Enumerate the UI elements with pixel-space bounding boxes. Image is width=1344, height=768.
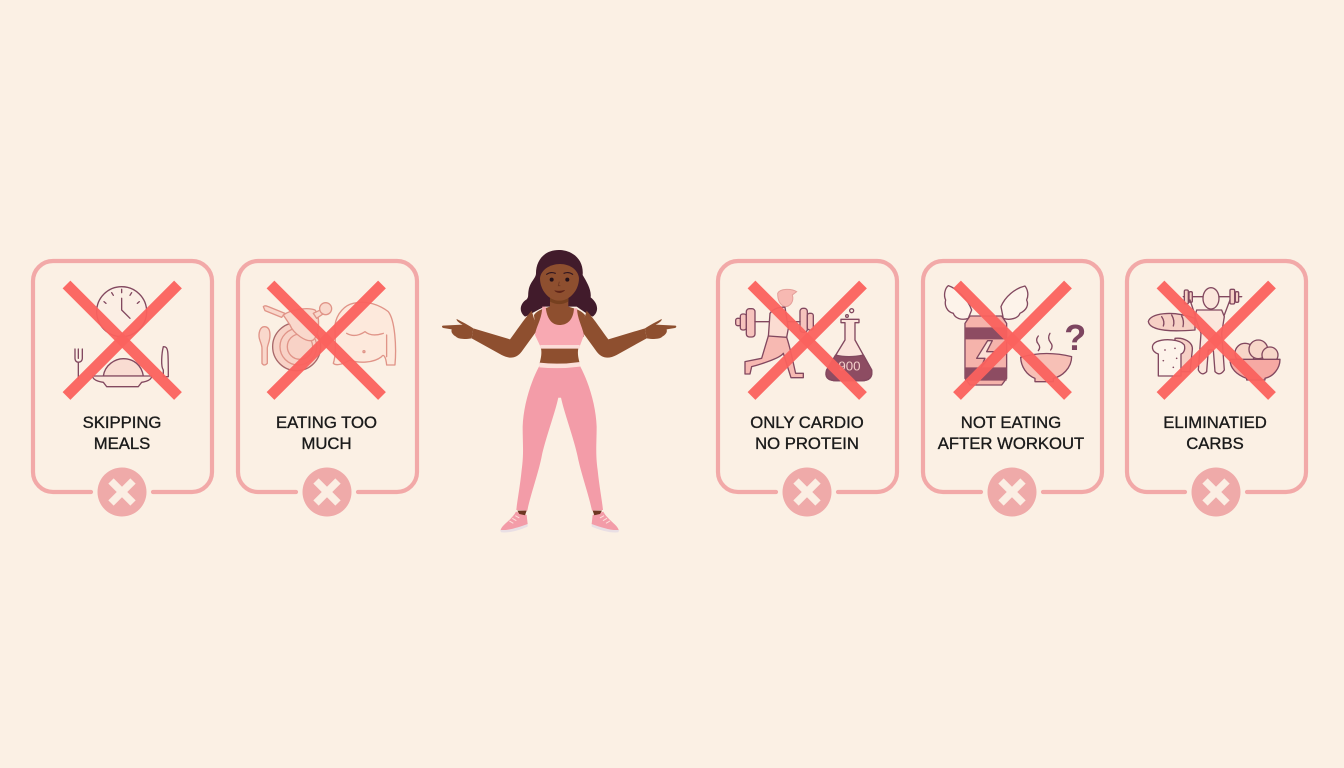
badge: x — [1192, 468, 1240, 516]
card frame — [33, 261, 212, 492]
label: AFTER WORKOUT — [938, 434, 1084, 453]
left arm — [442, 311, 537, 358]
figure: woman pointing both ways — [442, 250, 676, 533]
label: NOT EATING — [961, 413, 1061, 432]
icon: clock, fork, plate and knife — [75, 287, 168, 387]
top hem — [540, 345, 580, 349]
panel: only cardio no protein — [718, 261, 897, 516]
icon: runner with dumbbell and protein flask: 900 — [838, 359, 861, 374]
sports top — [535, 307, 584, 346]
icon: spoon, full plate, drumsticks and torso — [259, 302, 396, 371]
icon: winged energy can, hot bowl and question mark: ? — [1064, 317, 1086, 358]
card frame — [1127, 261, 1306, 492]
waistband — [539, 362, 580, 368]
label: ELIMINATIED — [1163, 413, 1267, 432]
panel: eliminated carbs — [1127, 261, 1306, 516]
left legging — [516, 366, 561, 511]
card frame — [718, 261, 897, 492]
left shoe — [500, 512, 528, 533]
badge: x — [782, 468, 832, 516]
label: MEALS — [94, 434, 150, 453]
card frame — [238, 261, 417, 492]
ankles — [517, 511, 602, 515]
face — [540, 264, 579, 301]
icon: runner with dumbbell and protein flask — [736, 289, 872, 381]
label: EATING TOO — [276, 413, 377, 432]
right arm — [581, 311, 676, 358]
red cross — [1160, 284, 1272, 396]
red cross — [270, 284, 382, 396]
label: SKIPPING — [83, 413, 161, 432]
icon: winged energy can, hot bowl and question mark — [945, 286, 1086, 385]
label: ONLY CARDIO — [750, 413, 864, 432]
right legging — [558, 366, 603, 511]
label: NO PROTEIN — [755, 434, 859, 453]
midriff — [539, 348, 580, 364]
panel: not eating after workout — [923, 261, 1102, 516]
right shoe — [592, 512, 619, 533]
red cross — [66, 284, 178, 396]
red cross — [752, 284, 863, 396]
label: MUCH — [301, 434, 352, 453]
neck shadow — [550, 295, 568, 304]
badge: x — [988, 468, 1036, 516]
card frame — [923, 261, 1102, 492]
panel: eating too much — [238, 261, 417, 516]
hair — [521, 250, 597, 317]
label: CARBS — [1186, 434, 1244, 453]
red cross — [957, 284, 1068, 396]
badge: x — [302, 468, 352, 516]
panel: skipping meals — [33, 261, 212, 516]
chest and neck — [534, 297, 585, 337]
icon: weightlifter, bread and bowl of food — [1148, 288, 1280, 380]
badge: x — [98, 468, 146, 516]
